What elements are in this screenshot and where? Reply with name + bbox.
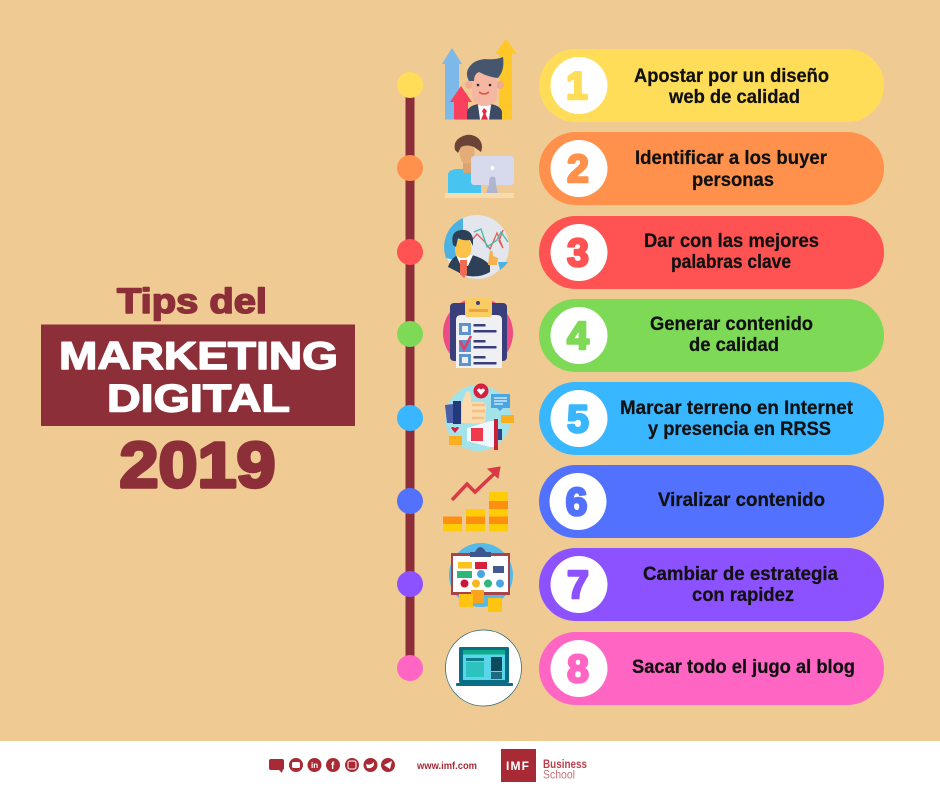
pill 7 [539,548,884,621]
label 7 [643,564,838,606]
IMF logo: Business [543,757,587,771]
social icons [269,758,395,773]
social icons: in [311,761,318,770]
title: DIGITAL: DIGITAL [107,378,290,420]
number badge 3 [550,224,608,281]
number badge 3: 3 [567,232,589,275]
step 3 [539,216,884,289]
IMF logo [501,749,587,782]
number badge 6: 6 [566,481,587,524]
timeline [397,72,423,681]
label 2: personas [692,170,774,191]
label 1 [634,66,829,108]
icon 6: growth arrow and coin stacks [443,467,508,532]
social icons: f [331,761,335,772]
step 1 [539,49,884,122]
step 7 [539,548,884,621]
website: www.imf.com [416,760,477,772]
label 4: de calidad [689,335,779,356]
IMF logo: IMF [506,759,529,773]
pill 6 [539,465,884,538]
number badge 8: 8 [567,648,589,691]
label 4: Generar contenido [650,314,813,335]
title: MARKETING: MARKETING [59,335,338,378]
label 1: web de calidad [668,87,800,108]
label 5: y presencia en RRSS [648,419,831,440]
number badge 2: 2 [567,148,589,191]
timeline dots [397,72,423,681]
number badge 8 [550,640,608,697]
footer [0,741,940,788]
label 4 [650,314,813,356]
label 8: Sacar todo el jugo al blog [632,657,855,678]
number badge 6 [550,473,606,530]
timeline line [406,85,414,668]
number badge 4 [550,307,608,364]
pill 1 [539,49,884,122]
title banner [41,324,355,426]
number badge 5: 5 [567,398,589,441]
title: Tips del: Tips del [117,282,267,321]
icon 1: businessman with growth arrows [442,39,517,120]
number badge 2 [550,140,608,197]
label 7: Cambiar de estrategia [643,564,838,585]
IMF logo: School [543,768,575,782]
number badge 5 [550,390,608,447]
number badge 7: 7 [567,564,589,607]
pill 5 [539,382,884,455]
step 5 [539,382,884,455]
label 3: palabras clave [671,252,791,273]
icon 5: social media thumbs up and megaphone [445,384,514,451]
pill 2 [539,132,884,205]
footer background [0,741,940,788]
step 8 [539,632,884,705]
pill 3 [539,216,884,289]
label 5 [620,398,854,440]
icon 3: presenter with chart [444,215,509,279]
icon 4: clipboard checklist [443,298,513,368]
icon 7: strategy board [449,543,513,612]
label 3: Dar con las mejores [644,231,819,252]
title block [41,282,355,501]
number badge 4: 4 [567,315,589,358]
label 1: Apostar por un diseño [634,66,829,87]
label 7: con rapidez [692,585,794,606]
icon 8: laptop with blog [446,630,522,706]
label 2: Identificar a los buyer [635,148,828,169]
step 4 [539,299,884,372]
title: 2019: 2019 [120,429,276,501]
label 5: Marcar terreno en Internet [620,398,854,419]
icon 2: person at computer [445,135,514,198]
label 6: Viralizar contenido [658,490,825,511]
label 3 [644,231,819,273]
number badge 7 [550,556,608,613]
pill 8 [539,632,884,705]
label 2 [635,148,828,191]
step 6 [539,465,884,538]
number badge 1: 1 [566,65,588,108]
number badge 1 [550,57,608,114]
pill 4 [539,299,884,372]
step 2 [539,132,884,205]
